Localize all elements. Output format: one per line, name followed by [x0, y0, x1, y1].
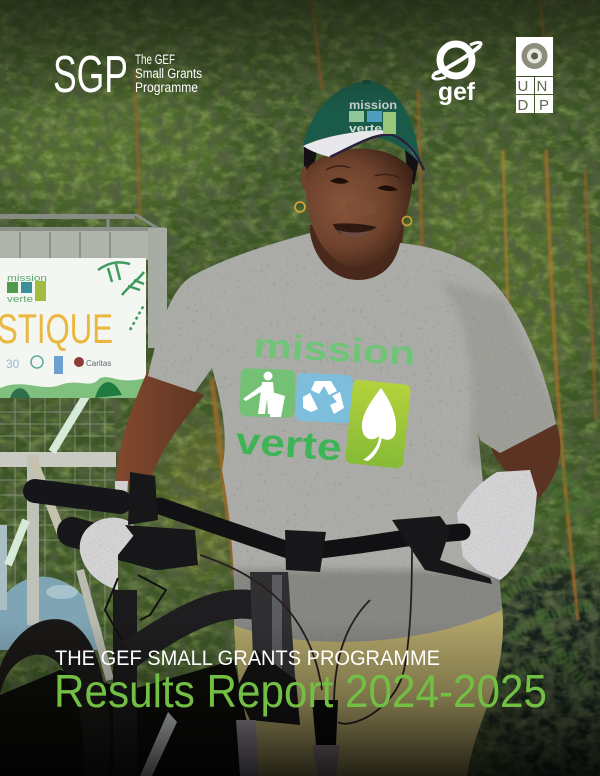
- logo: UNDP: N: [536, 78, 547, 95]
- logo: GEF: [433, 42, 481, 106]
- brake controls: [125, 472, 492, 584]
- UN emblem: [522, 43, 548, 69]
- woman: [116, 80, 560, 776]
- SGP programme name: Small Grants: [135, 66, 202, 81]
- cables: [200, 545, 412, 724]
- front wheel tire: [0, 619, 111, 776]
- ear: [301, 166, 307, 194]
- head: [295, 148, 413, 267]
- sign logo: verte: [7, 294, 33, 304]
- bicycle: [0, 472, 492, 776]
- recycling cage with sign: [0, 214, 167, 680]
- trousers: [234, 606, 503, 776]
- cap logo: [349, 98, 397, 135]
- icon: person at bin: [239, 368, 296, 418]
- icon: leaf card: [345, 379, 411, 469]
- head tube: [250, 572, 296, 690]
- cap logo: mission: [349, 98, 397, 112]
- bamboo stems: [135, 0, 596, 620]
- sign partner logos: Caritas: [86, 359, 111, 368]
- bike label: [140, 712, 177, 776]
- fork crown: [236, 650, 300, 725]
- SGP wordmark: SGP: [53, 46, 128, 104]
- cap: [303, 80, 424, 170]
- cap logo: verte: [349, 123, 382, 135]
- t-shirt text: verte: verte: [234, 420, 343, 470]
- dark lower frame area: [0, 660, 258, 776]
- logo: UNDP: [516, 37, 553, 114]
- right glove: [457, 470, 537, 580]
- t-shirt text: mission: mission: [253, 327, 416, 373]
- logo: UNDP: D: [517, 97, 528, 114]
- earring right: [402, 216, 412, 226]
- SGP programme name: The GEF: [135, 52, 175, 67]
- handlebar: [160, 506, 462, 553]
- face: [306, 148, 413, 267]
- top dark gradient: [0, 0, 600, 110]
- post: [27, 455, 39, 625]
- hair: [304, 146, 419, 185]
- grip lower: [72, 532, 157, 555]
- title: [54, 647, 547, 717]
- cage frame: [0, 214, 167, 680]
- supertitle: THE GEF SMALL GRANTS PROGRAMME: [55, 647, 440, 670]
- fork legs: [236, 720, 258, 776]
- earring left: [295, 202, 305, 212]
- sign word: STIQUE: [0, 305, 113, 352]
- logo: UNDP: U: [517, 78, 528, 95]
- logo: UNDP: P: [539, 97, 549, 114]
- sign panel: [0, 258, 146, 398]
- SGP programme name: Programme: [135, 80, 198, 95]
- sign logo: [7, 273, 47, 304]
- right arm: [490, 424, 560, 500]
- left glove: [80, 481, 138, 590]
- bottle cage wire: [105, 575, 166, 640]
- grip left: [35, 491, 120, 502]
- eyebrows: [326, 166, 400, 178]
- sign partner logos: [6, 356, 111, 374]
- sign logo: mission: [7, 273, 47, 283]
- palm leaves: [98, 262, 144, 330]
- bottles: [0, 577, 105, 650]
- bottom dark gradient: [0, 620, 600, 776]
- ferns lower right: [495, 460, 600, 690]
- cap brim: [303, 130, 423, 168]
- nose: [345, 201, 376, 216]
- main title: Results Report 2024-2025: [54, 665, 547, 717]
- logo: SGP: [53, 46, 206, 104]
- top tube: [125, 589, 255, 668]
- t-shirt: [140, 230, 560, 660]
- sign partner logos: 30: [6, 357, 20, 371]
- horizontal rail: [0, 452, 116, 467]
- smile: [333, 223, 377, 236]
- seat tube: [113, 590, 137, 776]
- icon: recycling: [295, 373, 353, 423]
- neck: [310, 225, 404, 282]
- left arm: [116, 370, 204, 490]
- eyes: [330, 178, 398, 191]
- logo: GEF: gef: [438, 78, 476, 106]
